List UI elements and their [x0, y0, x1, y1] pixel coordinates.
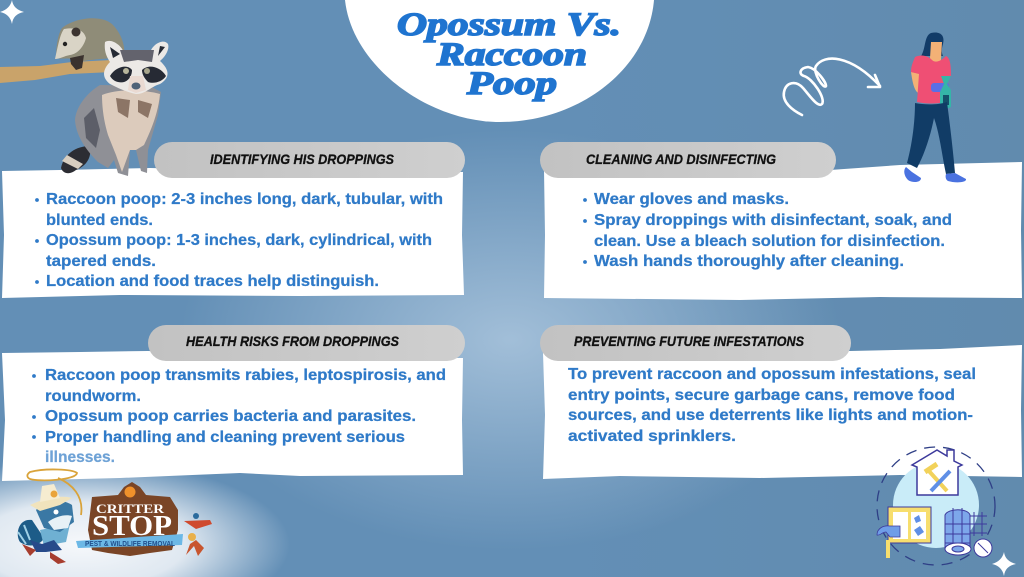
sign: CRITTER	[96, 501, 165, 516]
bullet list: Wash hands thoroughly after cleaning.	[594, 253, 904, 270]
heading pill	[540, 142, 836, 178]
bullet list: Raccoon poop transmits rabies, leptospirosis, and	[45, 367, 446, 384]
heading pill: IDENTIFYING HIS DROPPINGS	[210, 151, 395, 167]
sign: PEST & WILDLIFE REMOVAL	[85, 541, 176, 548]
illustration: curly arrow	[784, 59, 880, 115]
raccoon body	[75, 85, 161, 176]
bullet list: Opossum poop carries bacteria and parasites.	[45, 408, 416, 425]
title	[397, 7, 621, 102]
sign: STOP	[92, 511, 172, 542]
bullet list: Spray droppings with disinfectant, soak, and	[594, 212, 952, 229]
spray bottle	[940, 76, 951, 110]
paragraph: sources, and use deterrents like lights and motion-	[568, 407, 973, 424]
sign	[76, 482, 183, 556]
bullet list: Raccoon poop: 2-3 inches long, dark, tubular, with	[46, 191, 443, 208]
bullet list	[32, 367, 446, 466]
illustration: home repair icons	[877, 447, 1016, 576]
dashed circle	[877, 447, 995, 565]
heading pill	[540, 325, 851, 361]
heading pill: PREVENTING FUTURE INFESTATIONS	[574, 333, 805, 349]
house with tools	[912, 450, 962, 495]
glove	[931, 83, 949, 92]
window	[877, 507, 931, 558]
raccoon head	[104, 41, 168, 94]
bullet list: blunted ends.	[46, 212, 153, 229]
heading pill: HEALTH RISKS FROM DROPPINGS	[186, 333, 400, 349]
paragraph: activated sprinklers.	[568, 428, 736, 445]
panel: cleaning and disinfecting	[540, 142, 1022, 300]
sparkle top left	[0, 0, 24, 24]
bullet list: illnesses.	[45, 449, 115, 466]
opossum foot	[70, 55, 84, 70]
heading pill: CLEANING AND DISINFECTING	[586, 151, 776, 167]
panel: health risks from droppings	[2, 325, 465, 481]
paragraph	[568, 366, 976, 445]
logo: critter stop	[18, 469, 212, 564]
illustration: opossum on branch and raccoon	[0, 18, 168, 176]
wire mesh roll	[945, 508, 992, 557]
title: Poop	[466, 66, 557, 102]
panel: preventing future infestations	[540, 325, 1022, 479]
paragraph: To prevent raccoon and opossum infestations, seal	[568, 366, 976, 383]
bullet list: clean. Use a bleach solution for disinfection.	[594, 233, 945, 250]
bullet list: Location and food traces help distinguish.	[46, 273, 379, 290]
branch	[0, 60, 112, 83]
bullet list	[35, 191, 443, 290]
heading pill	[154, 142, 465, 178]
paragraph: entry points, secure garbage cans, remove food	[568, 387, 955, 404]
raccoon mascot	[18, 484, 74, 564]
bullet list	[583, 191, 952, 270]
bullet list: Proper handling and cleaning prevent serious	[45, 429, 405, 446]
raccoon tail	[61, 146, 90, 173]
shoes	[904, 167, 966, 182]
title circle	[345, 0, 654, 122]
bullet list: Wear gloves and masks.	[594, 191, 789, 208]
hair	[921, 33, 944, 56]
bullet list: tapered ends.	[46, 253, 156, 270]
opossum	[55, 18, 124, 62]
lasso	[27, 469, 81, 515]
trousers	[907, 102, 955, 174]
neck and arms	[911, 42, 942, 94]
panel: identifying his droppings	[2, 142, 465, 298]
title: Opossum Vs.	[397, 7, 621, 43]
sparkle	[992, 552, 1016, 576]
bullet list: Opossum poop: 1-3 inches, dark, cylindrical, with	[46, 232, 432, 249]
shirt	[911, 56, 951, 104]
title: Raccoon	[436, 37, 587, 73]
bullet list: roundworm.	[45, 388, 141, 405]
bug mascots	[184, 513, 212, 556]
light circle	[893, 462, 979, 548]
illustration: woman with spray bottle	[904, 33, 966, 182]
heading pill	[148, 325, 465, 361]
